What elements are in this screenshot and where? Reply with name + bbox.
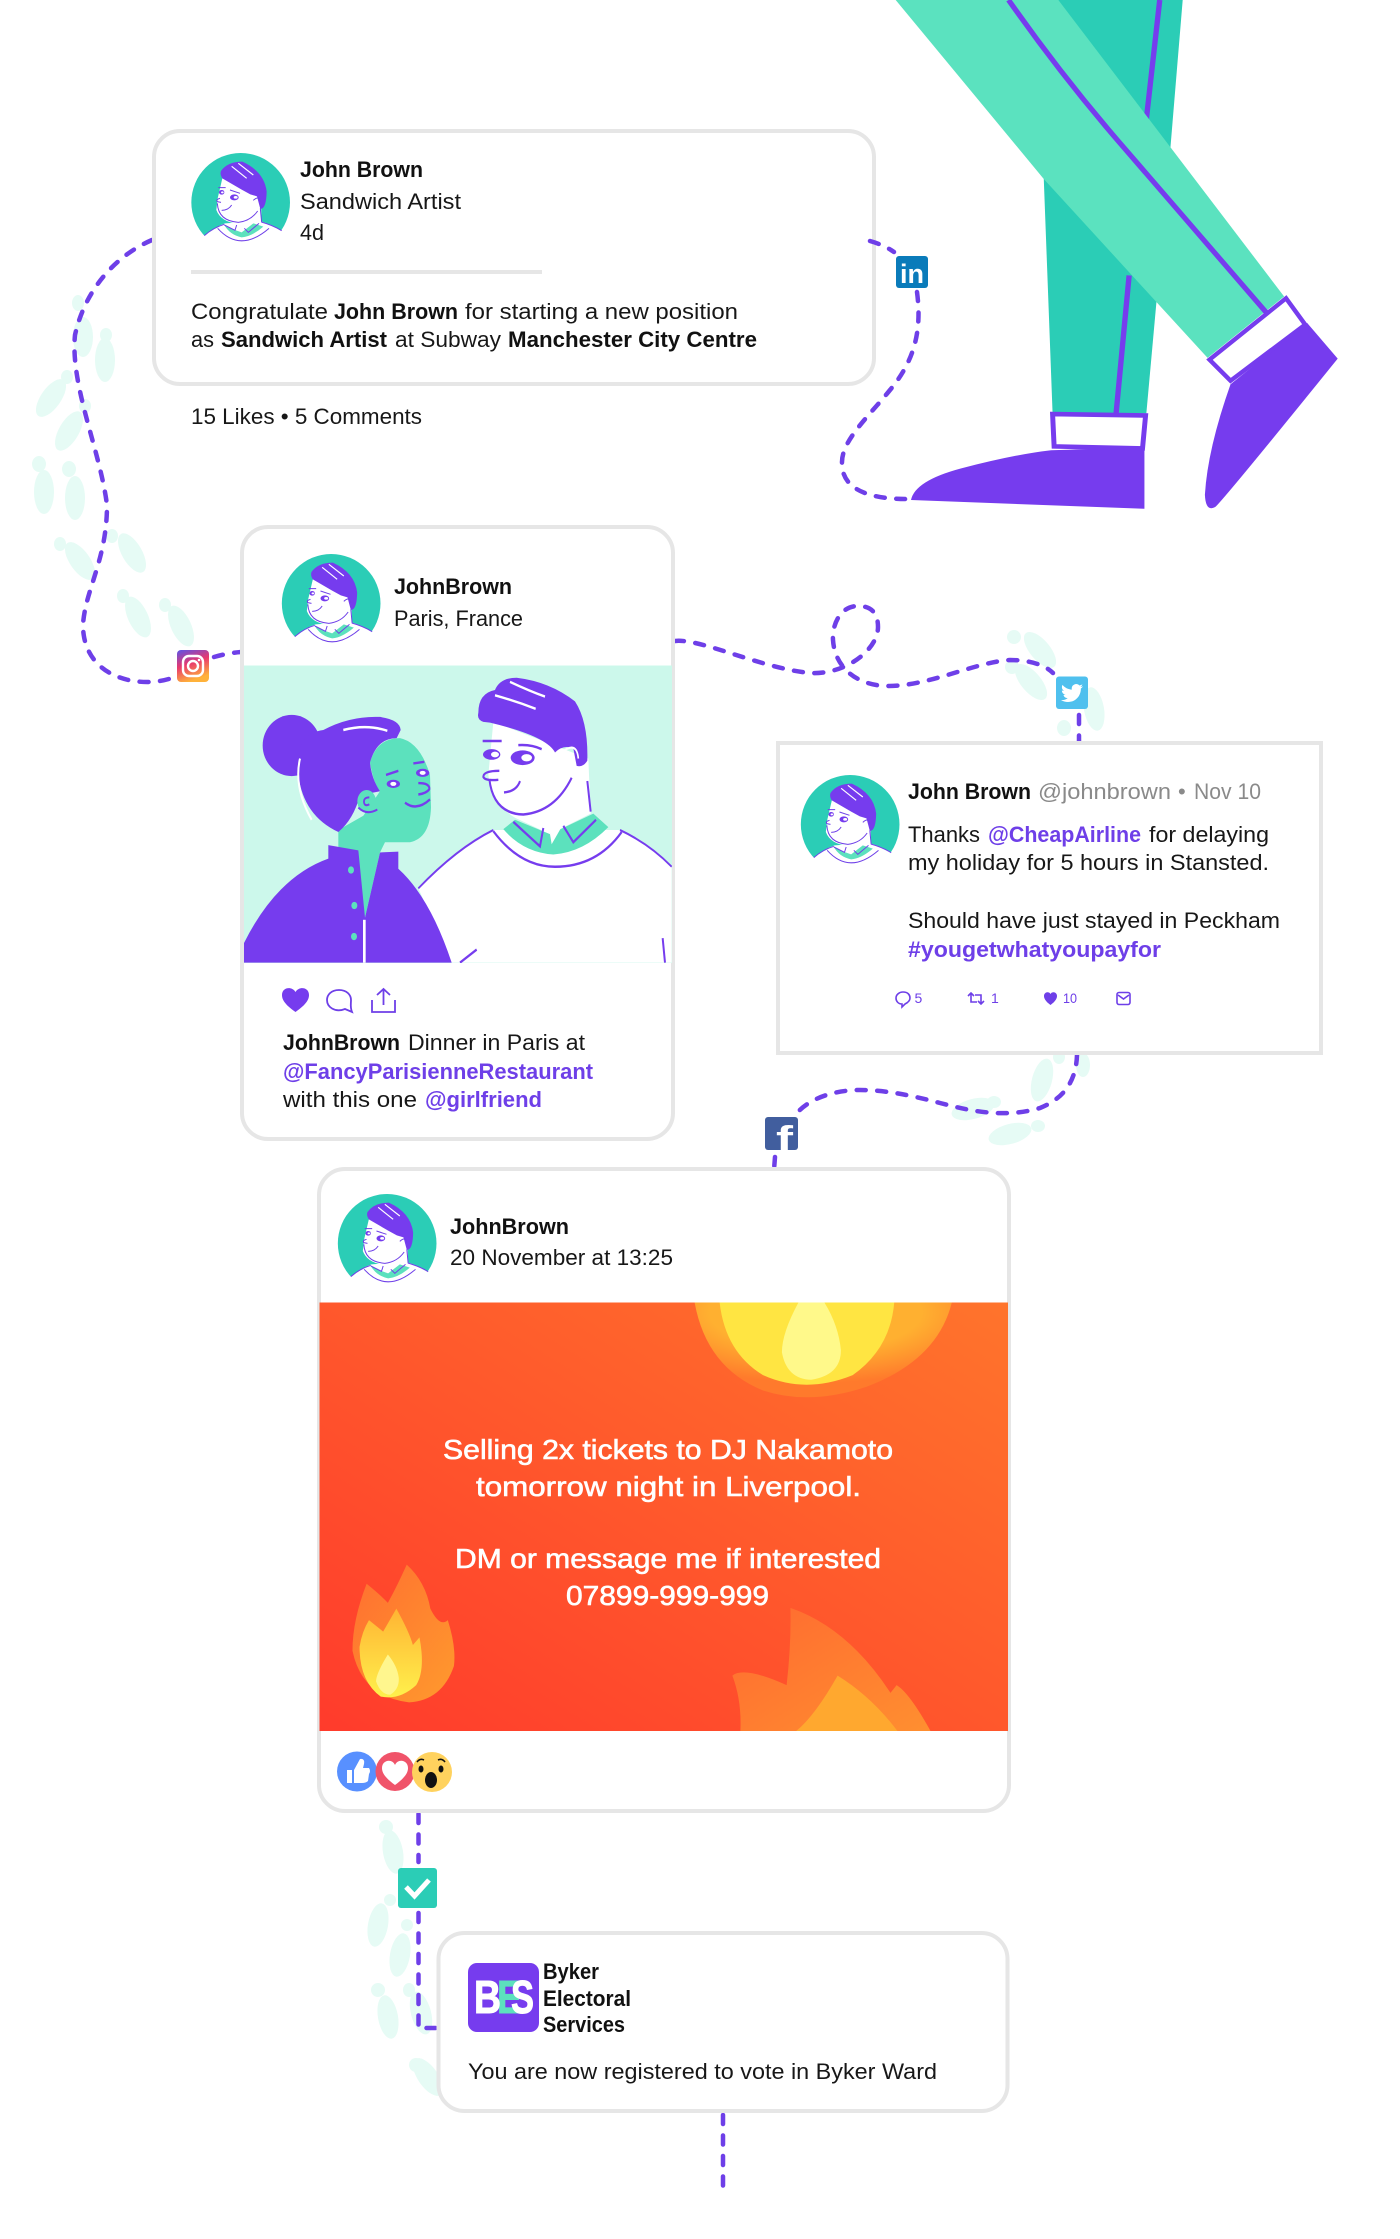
organisation name: Services [543,2012,625,2037]
avatar [279,554,385,666]
decorative footprints: left trail [30,295,199,650]
icon: instagram [177,650,209,682]
tweet body: for delaying [1149,822,1269,847]
tweet actions: 1 [991,990,999,1006]
tweet body: Thanks [908,822,980,847]
tweet actions [896,990,1130,1007]
tweet header: John Brown [908,779,1031,804]
post caption [282,1030,594,1112]
icon: heart [282,988,309,1012]
author details [394,574,523,631]
logo: BES [468,1963,539,2032]
tweet actions: 10 [1063,990,1077,1006]
dashed path connecting the posts [74,240,1079,2187]
author details: John Brown [300,157,423,182]
left flame [352,1565,454,1702]
event message [443,1434,893,1611]
logo: BES: B [474,1971,501,2023]
post message: as [191,327,214,352]
author details: Sandwich Artist [300,189,461,214]
panel: electoral registration [438,1933,1008,2111]
post message: Manchester City Centre [508,327,757,352]
bottom flame [732,1608,931,1731]
dashed link from linkedin card to icon [870,241,894,252]
author details: Paris, France [394,606,523,631]
decorative footprints: check trail [364,1820,449,2101]
likes and comments count: 15 Likes • 5 Comments [191,404,422,429]
author details: JohnBrown [450,1214,569,1239]
post message: for starting a new position [465,299,738,324]
organisation name [543,1959,631,2037]
organisation name: Byker [543,1959,599,1984]
icon: linkedin: in [900,259,924,289]
author details: 4d [300,220,324,245]
avatar [188,153,295,265]
event image with flames [320,1302,1008,1731]
panel: linkedin post [154,131,874,384]
icon: facebook [765,1117,798,1158]
avatar [335,1194,441,1306]
event message: tomorrow night in Liverpool. [476,1471,861,1502]
illustration: walking legs [896,0,1338,509]
panel: facebook post [319,1169,1009,1811]
tweet body [908,822,1280,962]
logo: BES: S [511,1971,534,2023]
icon: share [372,989,395,1012]
post caption: with this one [282,1087,417,1112]
post message: Sandwich Artist [221,327,388,352]
event message: 07899-999-999 [566,1580,769,1611]
post caption: @FancyParisienneRestaurant [283,1059,594,1084]
post message: Congratulate [191,299,328,324]
tweet header: Nov 10 [1194,779,1261,804]
author details [450,1214,673,1270]
event message: Selling 2x tickets to DJ Nakamoto [443,1434,893,1465]
organisation name: Electoral [543,1986,631,2011]
icon: linkedin [896,256,928,289]
tweet header [908,779,1261,804]
icon: twitter [1056,676,1088,709]
illustration: couple [243,666,672,963]
post caption: @girlfriend [425,1087,542,1112]
author details: 20 November at 13:25 [450,1245,673,1270]
tweet header: • [1178,779,1186,804]
icon: comment bubble [327,990,352,1012]
registration message: You are now registered to vote in Byker Ward [468,2059,937,2084]
post message: John Brown [334,299,458,324]
tweet body: @CheapAirline [988,822,1141,847]
post caption: JohnBrown [283,1030,400,1055]
post caption: Dinner in Paris at [408,1030,585,1055]
post message: at Subway [395,327,501,352]
icon: check mark [398,1868,437,1908]
event message: DM or message me if interested [455,1543,881,1574]
tweet body: #yougetwhatyoupayfor [908,937,1161,962]
tweet body: Should have just stayed in Peckham [908,908,1280,933]
tweet actions: 5 [914,990,922,1006]
avatar [798,775,904,887]
logo: BES: E [497,1971,522,2023]
reactions [337,1752,452,1792]
tweet body: my holiday for 5 hours in Stansted. [908,850,1269,875]
author details: JohnBrown [394,574,512,599]
top flame [695,1302,952,1397]
panel: instagram post [242,527,673,1139]
tweet header: @johnbrown [1038,779,1171,804]
author details [300,157,461,245]
icon: facebook: f [776,1120,794,1158]
post message [191,299,757,352]
panel: twitter post [778,743,1321,1053]
decorative footprints: twitter and facebook trail [949,627,1108,1149]
